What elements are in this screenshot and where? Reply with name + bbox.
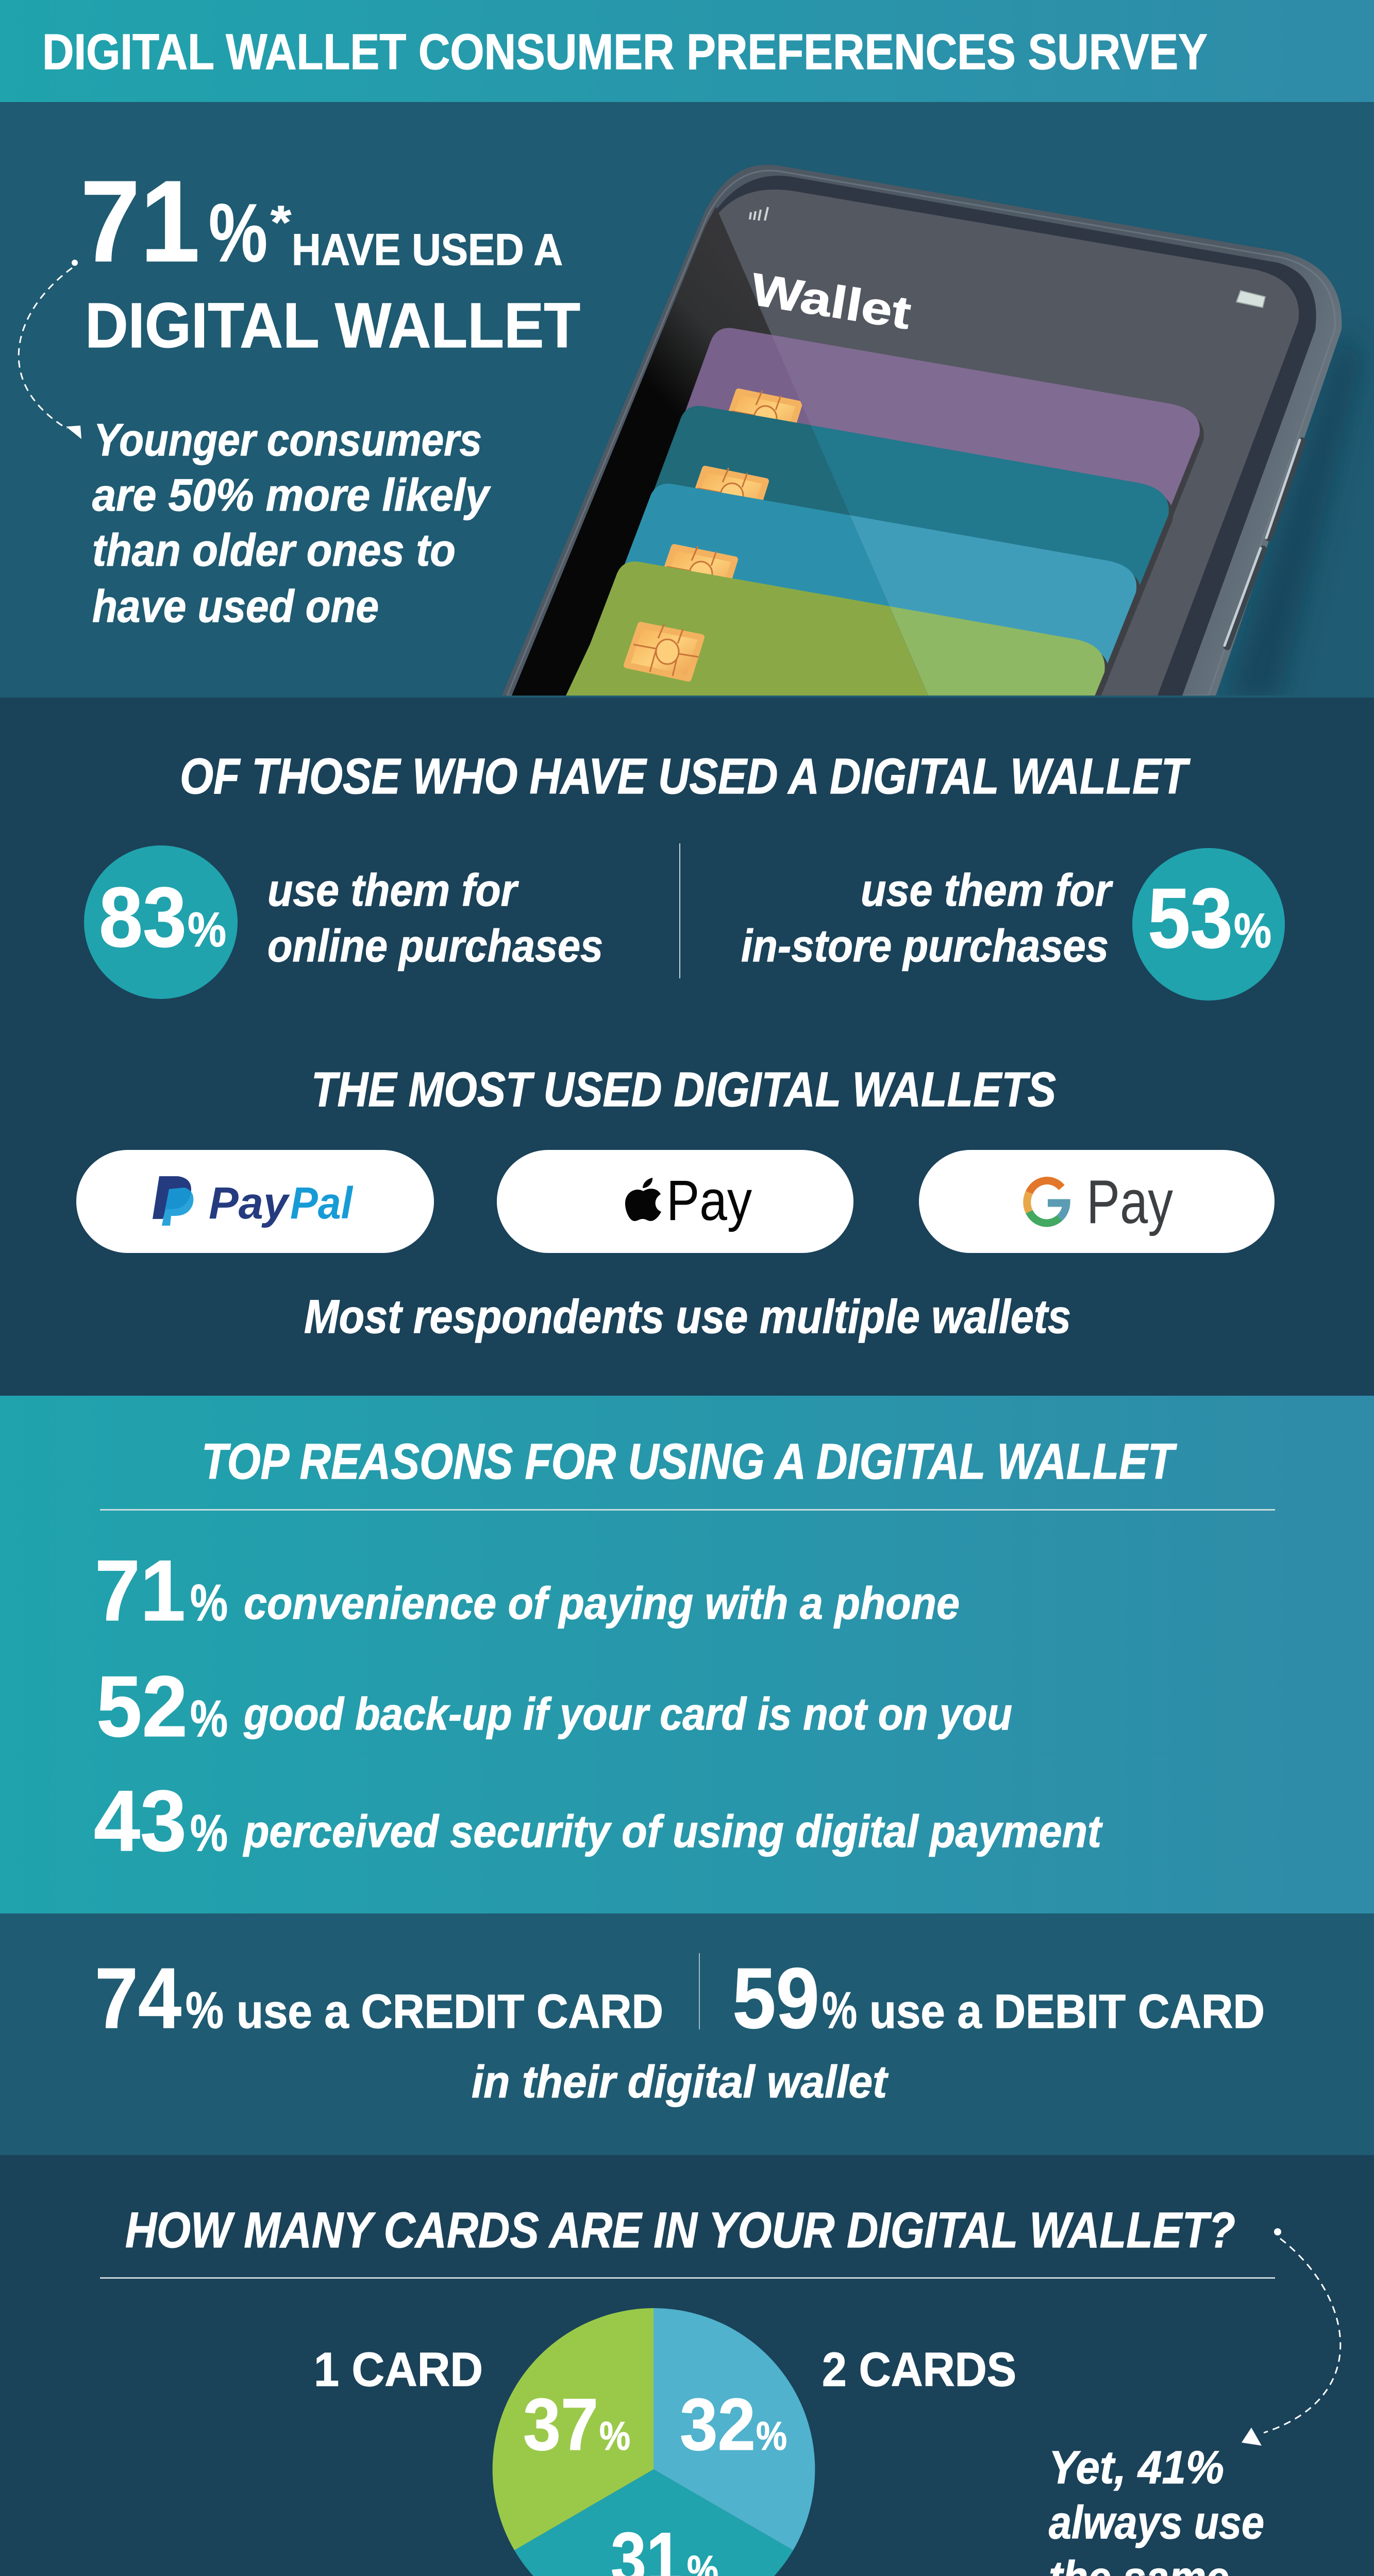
side buttons <box>1225 440 1302 647</box>
panel: credit and debit card use <box>0 1913 1374 2155</box>
reason 52%: good back-up if your card is not on you <box>243 1688 1012 1739</box>
pie chart: % <box>756 2413 787 2459</box>
heading: most used wallets: THE MOST USED DIGITAL WALLETS <box>311 1062 1056 1117</box>
stat: 83% online purchases: 83 <box>99 870 187 964</box>
stat: 53% in-store purchases: 53 <box>1148 871 1233 965</box>
logo pill: PayPal <box>76 1150 434 1253</box>
note: multiple wallets: Most respondents use multiple wallets <box>304 1291 1071 1343</box>
big stat 71%: HAVE USED A <box>292 225 563 275</box>
stat: 83% online purchases: online purchases <box>267 920 603 971</box>
stat: debit card: use a DEBIT CARD <box>869 1985 1265 2038</box>
stat: 53% in-store purchases: % <box>1234 904 1271 958</box>
chip 1 <box>729 388 802 422</box>
big stat 71%: * <box>271 197 291 248</box>
pie labels: 1 CARD <box>314 2343 483 2396</box>
panel: of those who have used a digital wallet <box>0 698 1374 1396</box>
icon: signal <box>750 207 768 221</box>
reason 43% <box>94 1772 1103 1869</box>
callout: 41% same card: Yet, 41% <box>1049 2442 1224 2494</box>
text: younger consumers <box>92 414 491 632</box>
arrow: dashed to same-card note <box>1242 2228 1341 2446</box>
arrow: dashed from stat to younger consumers <box>19 260 81 439</box>
pie labels: 2 CARDS <box>822 2343 1016 2396</box>
logo pill: PayPal: Pay <box>209 1178 290 1228</box>
chip 3 <box>664 544 738 579</box>
reason 71%: convenience of paying with a phone <box>244 1578 960 1629</box>
reason 52%: 52 <box>96 1658 188 1755</box>
text: younger consumers: than older ones to <box>92 524 456 575</box>
pie chart: 37 <box>523 2384 598 2466</box>
logo pill: Apple Pay <box>497 1150 853 1253</box>
stat: credit card: use a CREDIT CARD <box>237 1985 663 2038</box>
logo pill: Apple Pay: Pay <box>666 1169 752 1232</box>
stat: credit card: 74 <box>95 1951 181 2046</box>
heading: OF THOSE WHO HAVE USED A DIGITAL WALLET <box>180 748 1191 804</box>
wallet label: Wallet <box>748 263 914 339</box>
panel: hero 71% have used a digital wallet <box>0 102 1374 716</box>
stat: 83% online purchases: % <box>188 903 226 957</box>
panel: top reasons for using <box>0 1396 1374 1913</box>
wallet cards <box>559 328 1204 716</box>
text: younger consumers: are 50% more likely <box>92 469 491 520</box>
stat: 53% in-store purchases: use them for <box>861 865 1113 916</box>
big stat 71%: % <box>209 187 267 279</box>
stat: 83% online purchases <box>84 845 603 999</box>
big stat 71%: DIGITAL WALLET <box>85 291 580 361</box>
stat: debit card <box>732 1951 1265 2046</box>
stat: 53% in-store purchases: in-store purchases <box>741 920 1109 971</box>
chip 2 <box>695 466 769 500</box>
stat: 53% in-store purchases <box>741 848 1285 1001</box>
pie chart: % <box>599 2413 630 2459</box>
stat: 83% online purchases: use them for <box>267 865 519 916</box>
panel: how many cards <box>0 2155 1374 2576</box>
reason 52%: % <box>190 1690 228 1748</box>
stat: debit card: % <box>822 1981 857 2039</box>
stat: debit card: 59 <box>732 1951 819 2046</box>
callout: 41% same card <box>1049 2442 1264 2576</box>
icon: smartphone with wallet cards <box>502 165 1361 716</box>
title: DIGITAL WALLET CONSUMER PREFERENCES SURVEY <box>42 24 1208 80</box>
stat: credit card <box>95 1951 663 2046</box>
reason 52% <box>96 1658 1012 1755</box>
text: younger consumers: have used one <box>92 581 379 632</box>
logo pill: Google Pay: Pay <box>1086 1167 1173 1236</box>
heading: HOW MANY CARDS ARE IN YOUR DIGITAL WALLET? <box>125 2202 1235 2258</box>
text: in their digital wallet: in their digital wallet <box>472 2056 889 2107</box>
reason 43%: 43 <box>94 1772 187 1869</box>
reason 43%: perceived security of using digital payment <box>243 1806 1103 1857</box>
logo pill: Google Pay <box>919 1150 1275 1253</box>
chip 4 <box>627 624 701 679</box>
reason 71%: 71 <box>95 1542 186 1639</box>
big stat 71%: 71 <box>80 156 200 286</box>
pie labels <box>314 2343 1016 2576</box>
header banner <box>0 0 1374 102</box>
pie chart: 32 <box>680 2384 756 2466</box>
reason 43%: % <box>190 1804 228 1862</box>
pie chart <box>493 2308 815 2576</box>
callout: 41% same card: always use <box>1049 2497 1264 2549</box>
reason 71% <box>95 1542 960 1639</box>
icon: battery <box>1236 291 1265 308</box>
stat: credit card: % <box>186 1981 224 2039</box>
heading: TOP REASONS FOR USING A DIGITAL WALLET <box>202 1433 1178 1489</box>
logo pill: PayPal: Pal <box>290 1178 354 1228</box>
text: younger consumers: Younger consumers <box>94 414 482 465</box>
big stat 71% <box>80 156 580 361</box>
reason 71%: % <box>190 1574 228 1632</box>
